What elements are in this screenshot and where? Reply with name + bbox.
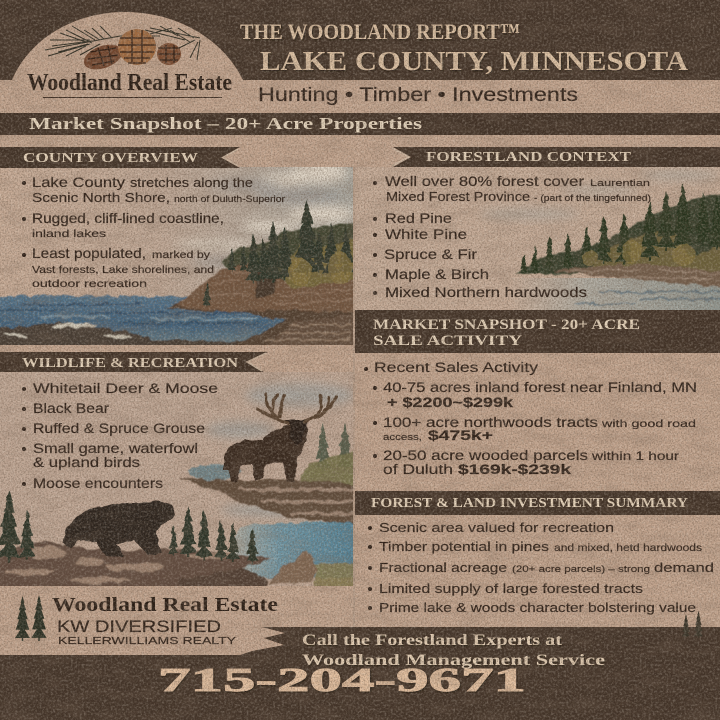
text block: county overview bullets: Vast forests, Lake shorelines, and xyxy=(32,264,214,276)
moose xyxy=(224,394,336,482)
text block: county overview bullets: outdoor recreation xyxy=(32,278,147,290)
text block: investment summary bullets: Limited supply of large forested tracts xyxy=(379,581,644,596)
text block: county overview bullets: stretches along the xyxy=(130,176,253,190)
text block: wildlife bullets: Ruffed & Spruce Grouse xyxy=(33,421,205,436)
subtitle: services: Hunting • Timber • Investments xyxy=(258,85,578,106)
text block: forestland bullets xyxy=(373,173,651,300)
icon: pine trees logo xyxy=(15,595,47,641)
text block: forestland bullets: Well over 80% forest cover xyxy=(385,173,584,189)
call to action line 2: Woodland Management Service xyxy=(302,652,605,669)
text block: county overview bullets: Scenic North Shore, xyxy=(32,190,170,205)
logo: wordmark: Woodland Real Estate xyxy=(27,70,232,96)
text block: forestland bullets: - (part of the tingefunned) xyxy=(534,193,651,203)
text block: county overview bullets: inland lakes xyxy=(32,228,106,240)
text block: forestland bullets: Laurentian xyxy=(590,178,650,189)
text block: investment summary bullets xyxy=(368,520,714,615)
text block: county overview bullets: north of Duluth-Superior xyxy=(174,194,285,204)
logo: underline xyxy=(43,97,222,98)
text block: recent sales activity: $475k+ xyxy=(428,427,493,443)
heading: wildlife and recreation xyxy=(0,352,268,372)
text block: investment summary bullets: Fractional acreage xyxy=(379,560,507,575)
panel: county overview scene xyxy=(0,161,360,350)
text block: county overview bullets: Least populated, xyxy=(32,245,146,261)
heading: county overview xyxy=(0,147,240,168)
text block: investment summary bullets: (20+ acre parcels) – strong xyxy=(512,564,650,574)
bear xyxy=(62,501,175,556)
text block: county overview bullets: Lake County xyxy=(32,174,125,190)
text block: recent sales activity: within 1 hour xyxy=(591,449,679,463)
heading: forest and land investment summary: FOREST & LAND INVESTMENT SUMMARY xyxy=(371,496,688,511)
text block: recent sales activity: 20-50 acre wooded parcels xyxy=(383,448,588,463)
text block: wildlife bullets xyxy=(22,381,218,491)
text block: wildlife bullets: Moose encounters xyxy=(33,476,163,491)
text block: recent sales activity xyxy=(364,360,697,477)
heading: market snapshot sale activity xyxy=(355,310,720,353)
text block: forestland bullets: Red Pine xyxy=(385,211,452,226)
text block: forestland bullets: Spruce & Fir xyxy=(384,247,478,262)
text block: forestland bullets: Mixed Forest Province xyxy=(386,189,530,204)
text block: investment summary bullets: Scenic area valued for recreation xyxy=(379,520,614,535)
text block: recent sales activity: access, xyxy=(383,432,422,442)
title line 2: LAKE COUNTY, MINNESOTA xyxy=(260,46,689,76)
heading: market snapshot sale activity: SALE ACTIVITY xyxy=(373,333,522,349)
heading: wildlife and recreation: WILDLIFE & RECREATION xyxy=(22,355,238,370)
banner: market snapshot: Market Snapshot – 20+ Acre Properties xyxy=(29,114,423,133)
text block: recent sales activity: of Duluth xyxy=(383,462,453,477)
footer logo: kw diversified: KW DIVERSIFIED xyxy=(57,618,221,636)
heading: county overview: COUNTY OVERVIEW xyxy=(23,150,199,165)
text block: forestland bullets: White Pine xyxy=(385,227,467,242)
panel: forestland scene xyxy=(478,167,720,310)
text block: forestland bullets: Mixed Northern hardwoods xyxy=(385,285,587,300)
text block: wildlife bullets: Black Bear xyxy=(33,401,110,416)
logo: pine cones and branch xyxy=(45,26,200,74)
call to action line 1: Call the Forestland Experts at xyxy=(302,632,563,649)
text block: county overview bullets: marked by xyxy=(152,249,211,261)
title line 1: THE WOODLAND REPORT™ xyxy=(240,19,520,44)
footer logo: keller williams: KELLERWILLIAMS REALTY xyxy=(58,635,236,647)
heading: forestland context xyxy=(392,147,720,167)
panel: wildlife scene xyxy=(0,372,360,591)
banner: market snapshot xyxy=(0,113,720,135)
text block: recent sales activity: + $2200~$299k xyxy=(387,395,514,410)
text block: recent sales activity: $169k-$239k xyxy=(458,461,571,477)
text block: investment summary bullets: Timber potential in pines xyxy=(379,539,550,554)
icon: small trees footer xyxy=(682,611,703,638)
text block: county overview bullets: Rugged, cliff-lined coastline, xyxy=(32,211,224,226)
text block: investment summary bullets: demand xyxy=(654,560,714,575)
text block: investment summary bullets: Prime lake & woods character bolstering value xyxy=(379,600,696,615)
footer logo: wordmark: Woodland Real Estate xyxy=(52,595,278,616)
heading: forest and land investment summary xyxy=(355,491,720,515)
text block: wildlife bullets: & upland birds xyxy=(33,455,140,470)
divider between columns xyxy=(353,167,355,627)
text block: recent sales activity: Recent Sales Activity xyxy=(374,360,538,375)
text block: recent sales activity: 100+ acre northwoods tracts xyxy=(383,415,598,430)
text block: wildlife bullets: Small game, waterfowl xyxy=(33,441,198,456)
phone number: 715-204-9671 xyxy=(158,662,526,699)
text block: forestland bullets: Maple & Birch xyxy=(385,267,489,282)
text block: county overview bullets xyxy=(22,174,285,290)
heading: forestland context: FORESTLAND CONTEXT xyxy=(426,149,631,164)
heading: market snapshot sale activity: MARKET SNAPSHOT - 20+ ACRE xyxy=(373,317,640,333)
text block: investment summary bullets: and mixed, hetd hardwoods xyxy=(554,542,702,554)
text block: wildlife bullets: Whitetail Deer & Moose xyxy=(33,381,218,396)
text block: recent sales activity: 40-75 acres inland forest near Finland, MN xyxy=(383,380,697,395)
text block: recent sales activity: with good road xyxy=(601,418,696,430)
